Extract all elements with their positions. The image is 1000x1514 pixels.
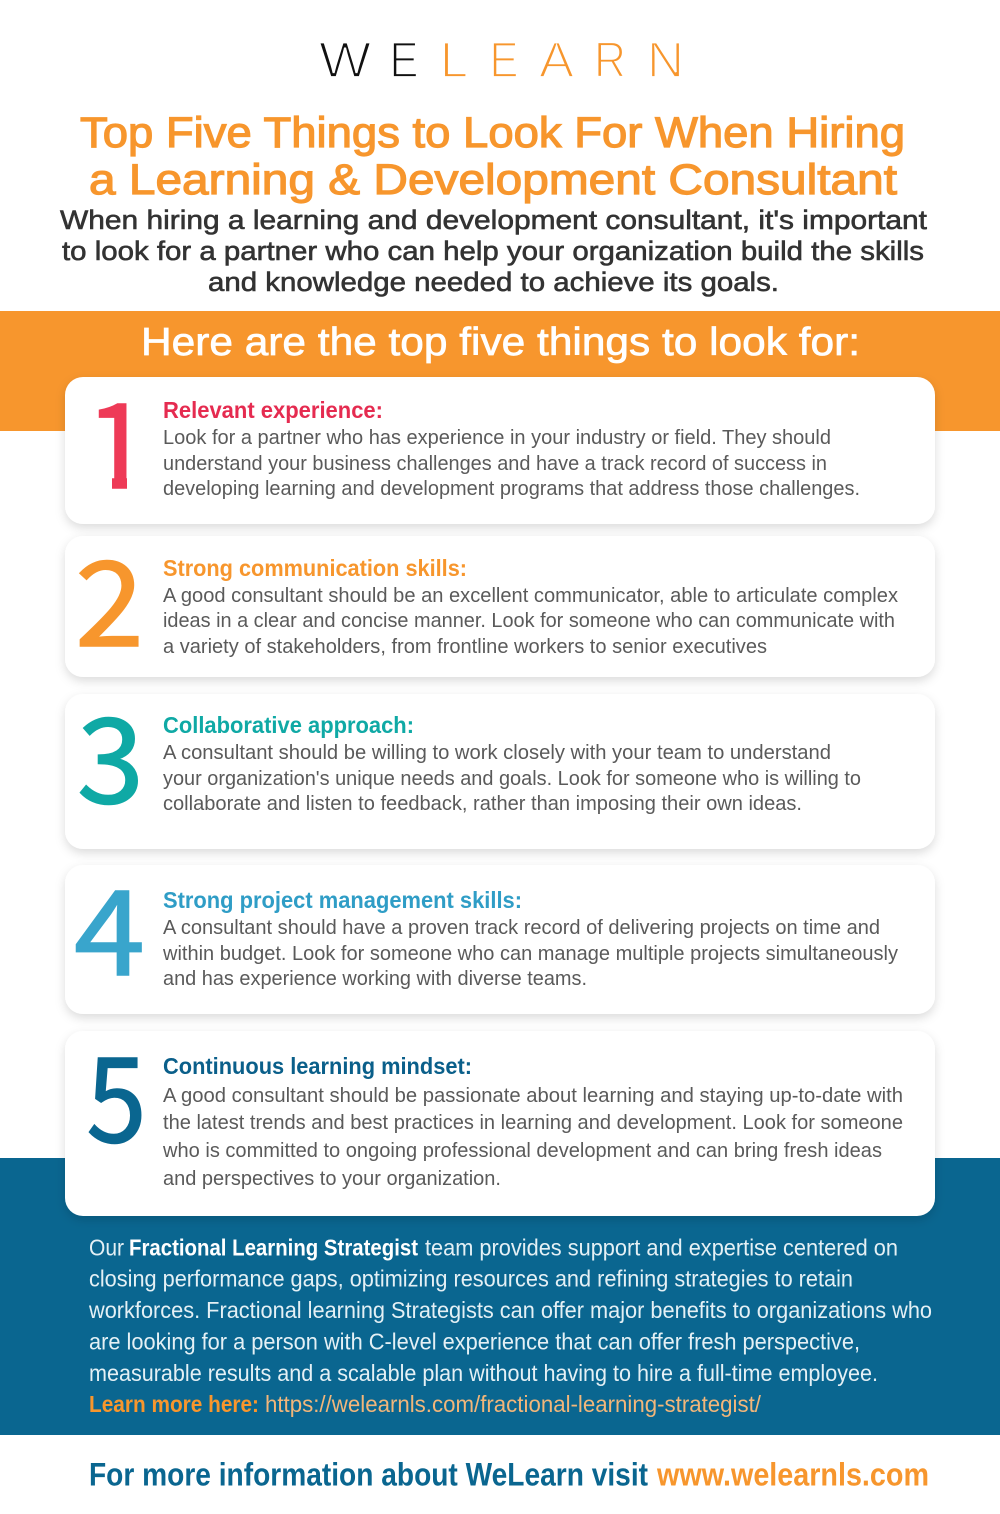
- body 4: within budget. Look for someone who can manage multiple projects simultaneously: [162, 942, 899, 965]
- body 4: [162, 916, 899, 990]
- logo: WeLearn: [319, 32, 684, 88]
- body 5: and perspectives to your organization.: [163, 1167, 501, 1190]
- panel: card 1: [65, 351, 935, 524]
- logo: WeLearn: A: [539, 32, 575, 88]
- body 4: A consultant should have a proven track record of delivering projects on time and: [163, 916, 880, 939]
- body 2: ideas in a clear and concise manner. Look for someone who can communicate with: [163, 609, 895, 632]
- footer call to action: www.welearnls.com: [656, 1456, 929, 1492]
- number 1: 1: [85, 351, 151, 522]
- body 1: understand your business challenges and have a track record of success in: [163, 452, 827, 475]
- fractional learning strategist text: https://welearnls.com/fractional-learning-strategist/: [265, 1391, 762, 1417]
- fractional learning strategist text: workforces. Fractional learning Strategists can offer major benefits to organizations who: [88, 1297, 932, 1323]
- body 1: Look for a partner who has experience in your industry or field. They should: [163, 426, 831, 449]
- fractional learning strategist text: Our: [89, 1234, 124, 1260]
- footer call to action: For more information about WeLearn visit: [89, 1456, 648, 1492]
- body 5: the latest trends and best practices in learning and development. Look for someone: [163, 1111, 903, 1134]
- fractional learning strategist text: team provides support and expertise centered on: [425, 1234, 898, 1260]
- band heading: Here are the top five things to look for:: [141, 321, 860, 364]
- heading 3: Collaborative approach:: [163, 712, 414, 738]
- heading 1: Relevant experience:: [163, 397, 383, 423]
- intro text: to look for a partner who can help your organization build the skills: [62, 236, 924, 266]
- body 5: A good consultant should be passionate about learning and staying up-to-date with: [163, 1084, 903, 1107]
- logo: WeLearn: W: [319, 32, 372, 88]
- orange band: [0, 311, 1000, 431]
- body 3: A consultant should be willing to work closely with your team to understand: [163, 741, 831, 764]
- intro text: and knowledge needed to achieve its goals.: [208, 267, 779, 297]
- title: a Learning & Development Consultant: [89, 156, 897, 204]
- fractional learning strategist text: are looking for a person with C-level experience that can offer fresh perspective,: [89, 1328, 860, 1354]
- panel: card 4: [65, 838, 935, 1014]
- body 5: [162, 1084, 903, 1190]
- intro text: When hiring a learning and development consultant, it's important: [60, 205, 928, 235]
- body 3: your organization's unique needs and goals. Look for someone who is willing to: [163, 767, 861, 790]
- fractional learning strategist text: Learn more here:: [89, 1391, 259, 1417]
- number 3: 3: [77, 666, 144, 837]
- body 3: [163, 741, 861, 815]
- logo: WeLearn: E: [390, 32, 418, 88]
- heading 5: Continuous learning mindset:: [163, 1053, 472, 1079]
- number 4: 4: [74, 838, 145, 1009]
- logo: WeLearn: N: [647, 32, 684, 88]
- panel: card 2: [65, 509, 935, 680]
- fractional learning strategist text: Fractional Learning Strategist: [129, 1234, 418, 1260]
- body 2: A good consultant should be an excellent communicator, able to articulate complex: [163, 584, 899, 607]
- number 2: 2: [75, 509, 144, 680]
- heading 2: Strong communication skills:: [163, 555, 467, 581]
- number 5: 5: [86, 1005, 146, 1176]
- body 2: [163, 584, 899, 658]
- body 1: developing learning and development programs that address those challenges.: [163, 477, 860, 500]
- body 4: and has experience working with diverse teams.: [163, 967, 587, 990]
- heading 4: Strong project management skills:: [163, 887, 522, 913]
- panel: card 5: [65, 1005, 935, 1216]
- body 1: [163, 426, 860, 500]
- title: Top Five Things to Look For When Hiring: [80, 109, 905, 157]
- intro text: [60, 205, 928, 297]
- fractional learning strategist text: measurable results and a scalable plan without having to hire a full-time employee.: [89, 1360, 878, 1386]
- logo: WeLearn: E: [490, 32, 518, 88]
- logo: WeLearn: R: [594, 32, 626, 88]
- logo: WeLearn: L: [440, 32, 468, 88]
- title: [80, 109, 905, 204]
- fractional learning strategist text: closing performance gaps, optimizing resources and refining strategies to retain: [89, 1266, 853, 1292]
- blue band: [0, 1158, 1000, 1435]
- fractional learning strategist text: [88, 1234, 932, 1417]
- body 3: collaborate and listen to feedback, rather than imposing their own ideas.: [163, 792, 802, 815]
- body 5: who is committed to ongoing professional development and can bring fresh ideas: [162, 1139, 882, 1162]
- body 2: a variety of stakeholders, from frontline workers to senior executives: [163, 635, 767, 658]
- panel: card 3: [65, 666, 935, 849]
